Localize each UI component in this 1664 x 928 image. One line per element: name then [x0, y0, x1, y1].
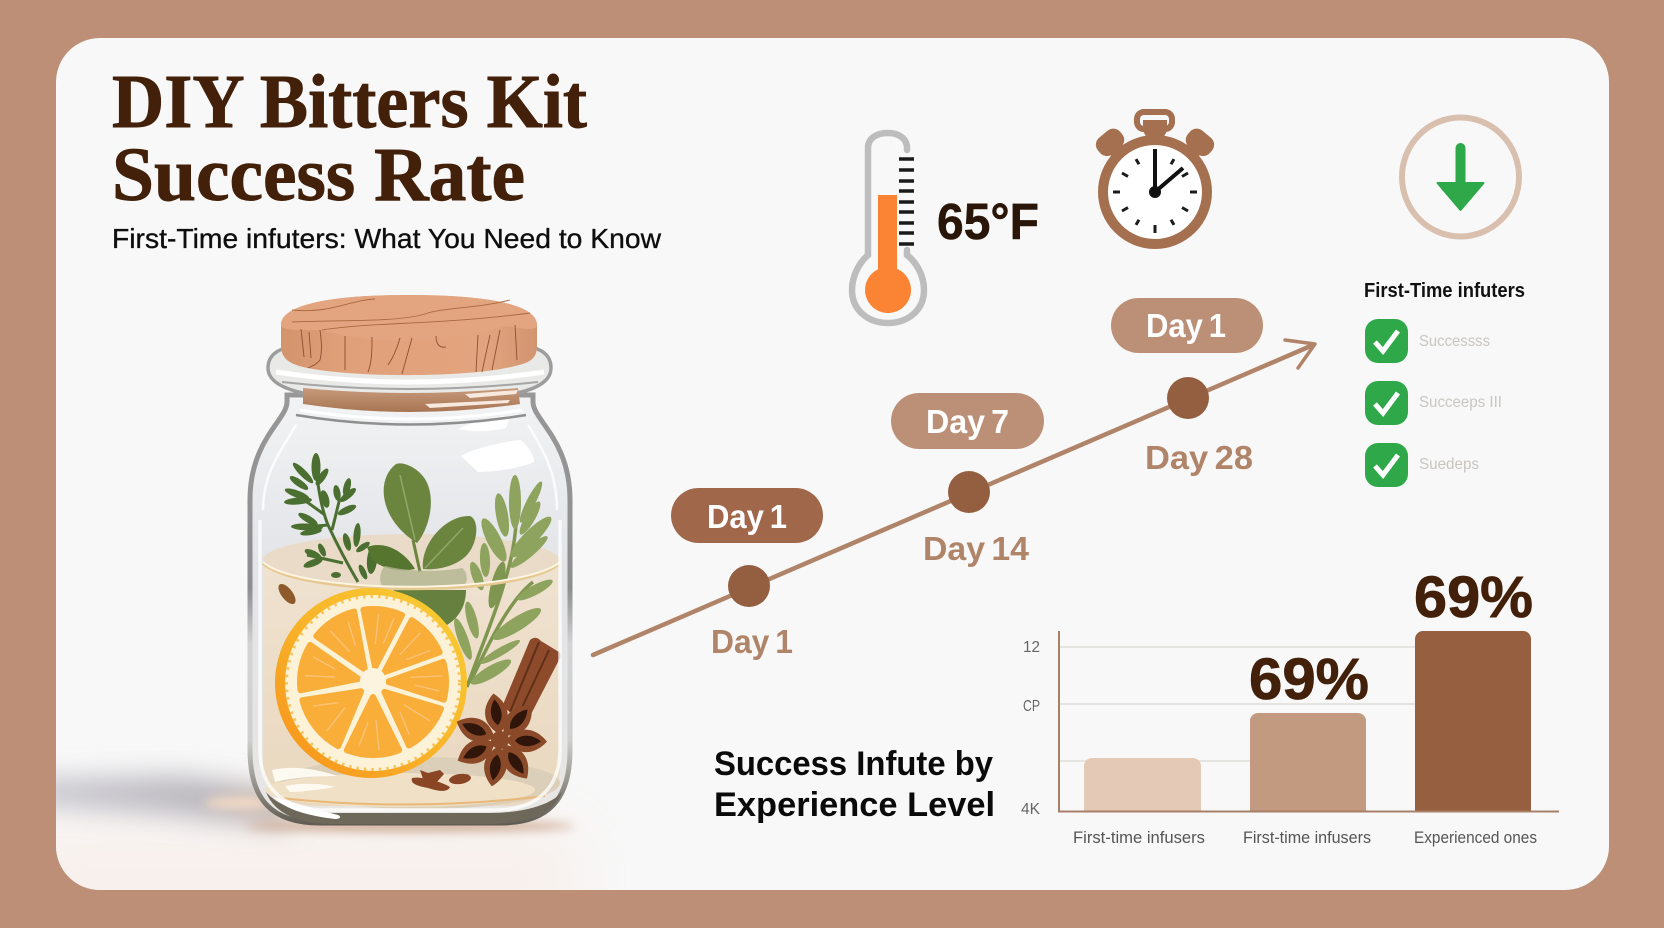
checklist item 1: Successss: [1419, 333, 1490, 350]
y axis labels: 4K: [1021, 801, 1040, 818]
temperature value: 65°F: [937, 193, 1039, 250]
star anise: [452, 692, 547, 788]
icon: download arrow circle: [1402, 118, 1519, 236]
glass reflections: [260, 416, 562, 824]
x axis labels: First-time infusers: [1073, 828, 1205, 847]
chart heading: [714, 745, 995, 824]
chart heading: Experience Level: [714, 786, 995, 824]
timeline step: day 1 / day 28: Day 28: [1145, 439, 1253, 476]
y axis labels: CP: [1023, 698, 1040, 715]
icon: thermometer: [852, 133, 924, 323]
seed: [275, 581, 299, 607]
thyme sprig: [284, 453, 378, 582]
liquid back surface: [263, 534, 559, 586]
value label middle bar: 69%: [1249, 647, 1369, 712]
heading: first-time infuters checklist: First-Time infuters: [1364, 280, 1525, 302]
submerged reflection: [380, 566, 467, 587]
title: Success Rate: [112, 133, 525, 217]
jar rim: [268, 346, 551, 424]
y axis labels: 12: [1023, 639, 1040, 656]
title: [112, 60, 587, 217]
herbs: [284, 453, 556, 689]
jar glass body: [250, 395, 570, 823]
checklist item 1: [1365, 319, 1490, 363]
bar: first-time infusers 69%: [1250, 713, 1366, 811]
bar chart: [1021, 565, 1559, 847]
timeline step: day 1: Day 1: [711, 623, 793, 660]
x axis labels: Experienced ones: [1414, 828, 1537, 847]
orange slice: [275, 588, 467, 778]
liquid surface line: [263, 562, 560, 588]
timeline step: day 1 / day 28: [1111, 298, 1263, 476]
checklist item 3: Suedeps: [1419, 456, 1479, 473]
cork plug seen through glass: [303, 388, 520, 412]
y axis labels: [1021, 639, 1040, 818]
bar: first-time infusers: [1084, 758, 1201, 811]
timeline step: day 1 / day 28: Day 1: [1146, 307, 1226, 344]
bar: experienced ones 69%: [1415, 631, 1531, 811]
cinnamon stick: [502, 638, 560, 722]
icon: stopwatch: [1092, 112, 1218, 244]
subtitle: First-Time infuters: What You Need to Know: [112, 223, 662, 254]
timeline step: day 7 / day 14: Day 14: [923, 530, 1030, 567]
cork lid: [281, 295, 537, 375]
rosemary sprig: [451, 475, 556, 689]
jar ground shadow: [56, 762, 578, 890]
checklist item 3: [1365, 443, 1479, 487]
liquid: [263, 563, 560, 806]
title: DIY Bitters Kit: [112, 60, 587, 144]
timeline step: day 1: Day 1: [707, 498, 787, 535]
timeline step: day 7 / day 14: Day 7: [926, 403, 1009, 440]
illustration: glass jar with botanicals: [250, 295, 570, 824]
x axis labels: First-time infusers: [1243, 828, 1371, 847]
checklist item 2: Succeeps III: [1419, 394, 1502, 411]
x axis labels: [1073, 828, 1537, 847]
value label right bar: 69%: [1414, 565, 1533, 630]
timeline step: day 7 / day 14: [891, 393, 1044, 567]
sage leaves: [367, 463, 476, 625]
axes: [1058, 631, 1559, 812]
liquid floor: [265, 757, 560, 809]
checklist item 2: [1365, 381, 1502, 425]
timeline step: day 1: [671, 488, 823, 660]
chart heading: Success Infute by: [714, 745, 993, 783]
small spices: [412, 770, 472, 791]
timeline arrow: [593, 340, 1315, 655]
